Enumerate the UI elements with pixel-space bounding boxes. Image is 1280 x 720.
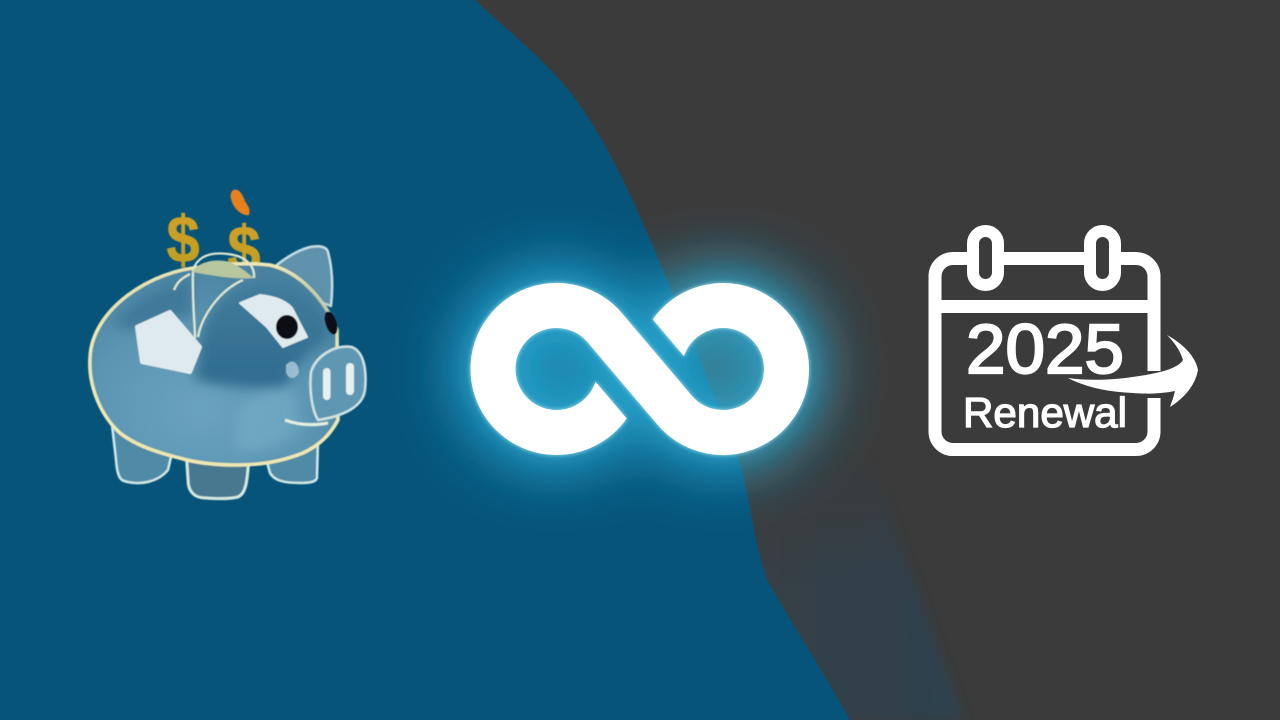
nostril left [323,368,330,400]
coin slot highlight [192,260,254,278]
back leg right [265,440,318,483]
icon: glass piggy bank with dollar signs [90,190,366,499]
lower belly highlight [235,389,300,452]
pig ear [273,246,332,306]
calendar ring left [973,231,998,285]
pig top seam [174,253,254,338]
pig eye [276,315,298,339]
icon: calendar 2025 renewal [935,231,1198,450]
dollar sign right: $ [227,213,261,287]
highlight left [137,312,200,372]
pig head shading [192,278,332,388]
dollar sign left: $ [166,203,200,277]
renewal text: Renewal [963,389,1127,436]
pig snout [310,347,366,420]
calendar ring right [1090,231,1115,285]
nostril right [346,363,354,395]
gap behind arrow [1146,371,1164,398]
background: soft transition band [764,522,962,720]
pig mouth [285,420,328,425]
renewal arrow [1068,335,1198,407]
back leg left [112,425,175,483]
background: blue curved panel [0,0,850,720]
pig body [90,264,338,465]
cheek glints [286,361,299,378]
front leg [186,450,249,499]
infinity symbol with glow [493,305,786,433]
calendar divider [935,300,1154,313]
calendar frame [935,258,1154,450]
pig shoulder shading [112,278,192,330]
year text: 2025 [966,310,1124,388]
falling coin fragment [231,190,250,215]
pig far eye [322,310,340,336]
highlight right [240,295,307,347]
